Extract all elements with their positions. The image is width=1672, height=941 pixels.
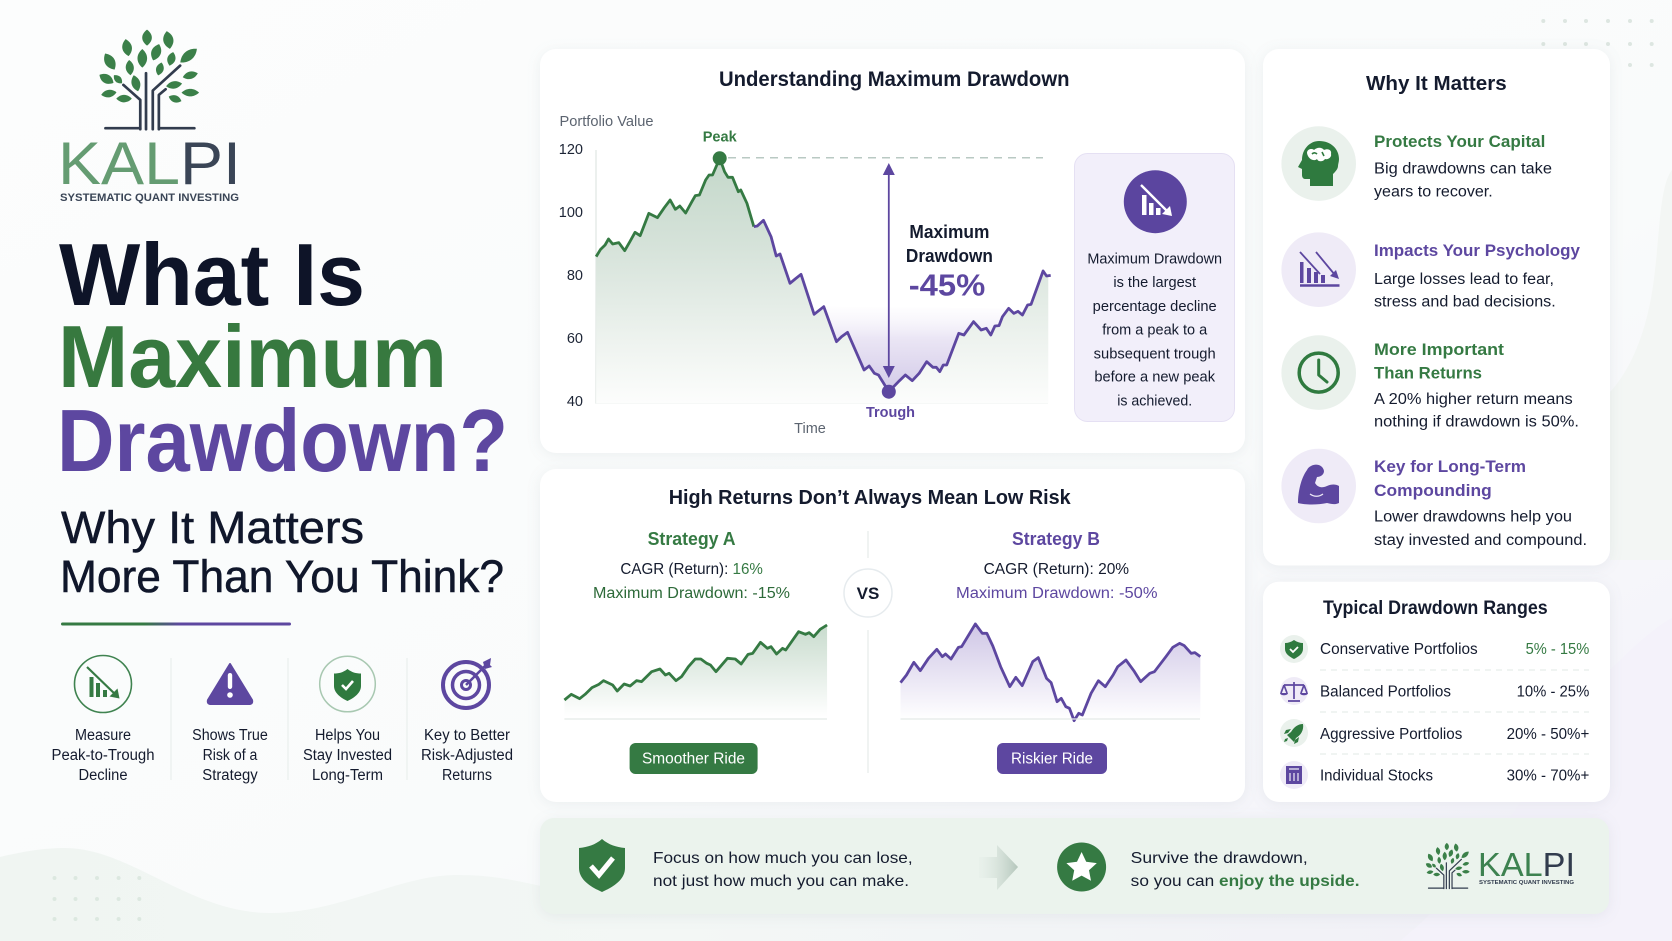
row: conservative: Conservative Portfolios bbox=[1320, 641, 1478, 658]
item: protects capital: years to recover. bbox=[1374, 184, 1493, 201]
badge: smoother ride: Smoother Ride bbox=[642, 750, 745, 768]
vs badge: VS bbox=[857, 584, 879, 603]
panel: strategy comparison bbox=[540, 469, 1245, 802]
item: long-term compounding: Lower drawdowns help you bbox=[1374, 509, 1572, 526]
panel: understanding maximum drawdown bbox=[540, 49, 1245, 453]
callout: -45 percent: Maximum bbox=[909, 222, 989, 242]
badge: smoother ride bbox=[630, 743, 758, 774]
line chart: portfolio value: 40 bbox=[567, 394, 583, 410]
row: balanced: 10% - 25% bbox=[1517, 684, 1590, 701]
row: aggressive: 20% - 50%+ bbox=[1507, 726, 1589, 743]
vs badge bbox=[844, 569, 892, 617]
item: impacts psychology bbox=[1281, 232, 1581, 310]
item: long-term compounding: Key for Long-Term bbox=[1374, 457, 1526, 476]
text: focus on losses bbox=[653, 850, 913, 890]
line chart: portfolio value: Time bbox=[794, 421, 826, 437]
panel heading: Understanding Maximum Drawdown bbox=[719, 68, 1070, 91]
row: aggressive bbox=[1280, 719, 1589, 747]
key point: risk adjusted: Key to Better bbox=[424, 727, 510, 744]
item: impacts psychology: stress and bad decisions. bbox=[1374, 294, 1556, 310]
icon: scales bbox=[1280, 677, 1308, 705]
item: more important than returns: nothing if drawdown is 50%. bbox=[1374, 414, 1579, 431]
line chart: portfolio value: 60 bbox=[567, 331, 583, 347]
title: Drawdown? bbox=[57, 391, 508, 490]
item: long-term compounding: Compounding bbox=[1374, 481, 1492, 500]
text: survive the drawdown: so you can bbox=[1131, 873, 1214, 890]
panel: typical drawdown ranges bbox=[1263, 582, 1610, 802]
icon: target bbox=[443, 658, 492, 708]
callout: -45 percent bbox=[906, 222, 993, 302]
icon: shield bbox=[1280, 635, 1308, 663]
row: conservative: 5% - 15% bbox=[1526, 641, 1590, 658]
key point: measure: Peak-to-Trough bbox=[52, 747, 154, 764]
item: long-term compounding: stay invested and compound. bbox=[1374, 532, 1587, 549]
text: focus on losses: not just how much you can make. bbox=[653, 873, 909, 890]
definition box: from a peak to a bbox=[1102, 323, 1208, 339]
key point: true risk: Strategy bbox=[202, 767, 258, 784]
key point: true risk: Shows True bbox=[192, 727, 268, 744]
callout: -45 percent: -45% bbox=[909, 268, 985, 302]
definition box: Maximum Drawdown bbox=[1087, 252, 1222, 268]
strategy B bbox=[900, 529, 1200, 774]
panel: bottom takeaway banner bbox=[540, 818, 1609, 914]
strategy A: CAGR (Return): 16% bbox=[620, 561, 763, 578]
icon: flexed arm bbox=[1281, 449, 1356, 523]
key point: stay invested: Long-Term bbox=[312, 767, 383, 784]
definition box: subsequent trough bbox=[1094, 346, 1216, 362]
strategy A: Maximum Drawdown: -15% bbox=[593, 585, 790, 602]
key point: measure bbox=[52, 656, 154, 784]
item: impacts psychology: Large losses lead to fear, bbox=[1374, 271, 1554, 288]
title: What Is bbox=[59, 225, 365, 324]
text: survive the drawdown: Survive the drawdown, bbox=[1131, 850, 1308, 867]
item: more important than returns: Than Returns bbox=[1374, 364, 1482, 382]
logo: Kalpi bbox=[58, 30, 241, 204]
key point: true risk bbox=[192, 664, 268, 784]
icon: tree bbox=[97, 30, 200, 129]
key point: measure: Decline bbox=[78, 767, 128, 784]
logo: Kalpi small: KALPI bbox=[1478, 846, 1575, 883]
definition box: is the largest bbox=[1113, 275, 1196, 291]
definition box: percentage decline bbox=[1093, 299, 1217, 315]
marker: trough bbox=[866, 385, 915, 421]
text: survive the drawdown: enjoy the upside. bbox=[1219, 873, 1360, 890]
logo wordmark: KALPI bbox=[58, 130, 241, 197]
marker: peak bbox=[703, 129, 737, 165]
callout: -45 percent: Drawdown bbox=[906, 246, 993, 266]
icon: star badge bbox=[1057, 842, 1106, 892]
item: long-term compounding bbox=[1281, 449, 1587, 549]
row: balanced: Balanced Portfolios bbox=[1320, 684, 1451, 701]
icon: declining bars bbox=[74, 656, 132, 712]
key points row bbox=[52, 656, 513, 784]
arrow: drawdown span bbox=[883, 163, 895, 378]
line chart: portfolio value: 100 bbox=[559, 205, 583, 221]
item: more important than returns: A 20% higher return means bbox=[1374, 391, 1573, 408]
logo tagline: SYSTEMATIC QUANT INVESTING bbox=[60, 192, 239, 204]
badge: riskier ride: Riskier Ride bbox=[1011, 750, 1093, 768]
icon: warning triangle bbox=[208, 664, 252, 704]
line chart: portfolio value: Portfolio Value bbox=[560, 114, 654, 130]
title bbox=[57, 225, 508, 490]
panel: why it matters bbox=[1263, 49, 1610, 566]
row: conservative bbox=[1280, 635, 1590, 663]
line chart: portfolio value: 80 bbox=[567, 268, 583, 284]
key point: stay invested bbox=[303, 656, 392, 784]
subtitle: Why It Matters bbox=[61, 502, 364, 553]
key point: measure: Measure bbox=[75, 727, 131, 744]
key point: stay invested: Stay Invested bbox=[303, 747, 392, 764]
row: balanced bbox=[1280, 677, 1590, 705]
strategy A bbox=[564, 529, 827, 774]
badge: riskier ride bbox=[997, 743, 1107, 774]
strategy B: CAGR (Return): 20% bbox=[984, 561, 1129, 578]
row: individual stocks bbox=[1280, 761, 1589, 789]
icon: clock bbox=[1281, 335, 1356, 410]
marker: peak: Peak bbox=[703, 129, 737, 146]
marker: trough: Trough bbox=[866, 404, 915, 421]
icon: shield check bbox=[579, 839, 625, 892]
definition box: is achieved. bbox=[1117, 394, 1192, 410]
row: individual stocks: 30% - 70%+ bbox=[1507, 768, 1589, 785]
logo: Kalpi small bbox=[1425, 843, 1575, 889]
icon: rocket bbox=[1280, 719, 1308, 747]
key point: stay invested: Helps You bbox=[315, 727, 380, 744]
icon: head with brain bbox=[1281, 126, 1356, 201]
subtitle bbox=[60, 502, 504, 602]
icon: declining bars bbox=[1124, 170, 1187, 233]
item: protects capital: Big drawdowns can take bbox=[1374, 161, 1552, 178]
definition box: before a new peak bbox=[1094, 370, 1216, 386]
item: more important than returns: More Important bbox=[1374, 340, 1504, 359]
strategy B: Maximum Drawdown: -50% bbox=[956, 585, 1158, 602]
line chart: portfolio value bbox=[559, 114, 1051, 437]
title rule bbox=[61, 622, 291, 626]
item: impacts psychology: Impacts Your Psychology bbox=[1374, 241, 1581, 260]
strategy B: Strategy B bbox=[1012, 529, 1100, 549]
line chart: strategy B bbox=[900, 624, 1200, 721]
panel heading: Why It Matters bbox=[1366, 72, 1507, 95]
icon: shield check bbox=[320, 656, 375, 712]
title: Maximum bbox=[58, 307, 447, 406]
text: focus on losses: Focus on how much you can lose, bbox=[653, 850, 913, 867]
line chart: portfolio value: 120 bbox=[559, 142, 583, 158]
icon: falling chart bbox=[1281, 232, 1356, 307]
subtitle: More Than You Think? bbox=[60, 551, 504, 602]
logo: Kalpi small: SYSTEMATIC QUANT INVESTING bbox=[1479, 880, 1574, 886]
arrow: gradient chevron bbox=[979, 845, 1018, 890]
panel heading: Typical Drawdown Ranges bbox=[1323, 597, 1548, 619]
key point: true risk: Risk of a bbox=[203, 747, 258, 764]
panel heading: High Returns Don’t Always Mean Low Risk bbox=[669, 486, 1071, 509]
icon: building bbox=[1280, 761, 1308, 789]
definition box bbox=[1074, 154, 1234, 422]
item: protects capital: Protects Your Capital bbox=[1374, 132, 1545, 151]
line chart: strategy A bbox=[564, 625, 827, 719]
key point: risk adjusted bbox=[421, 658, 513, 784]
row: individual stocks: Individual Stocks bbox=[1320, 768, 1433, 785]
key point: risk adjusted: Risk-Adjusted bbox=[421, 747, 513, 764]
item: protects capital bbox=[1281, 126, 1552, 201]
strategy A: Strategy A bbox=[648, 529, 736, 549]
key point: risk adjusted: Returns bbox=[442, 767, 492, 784]
item: more important than returns bbox=[1281, 335, 1579, 431]
row: aggressive: Aggressive Portfolios bbox=[1320, 726, 1463, 743]
text: survive the drawdown bbox=[1131, 850, 1360, 890]
